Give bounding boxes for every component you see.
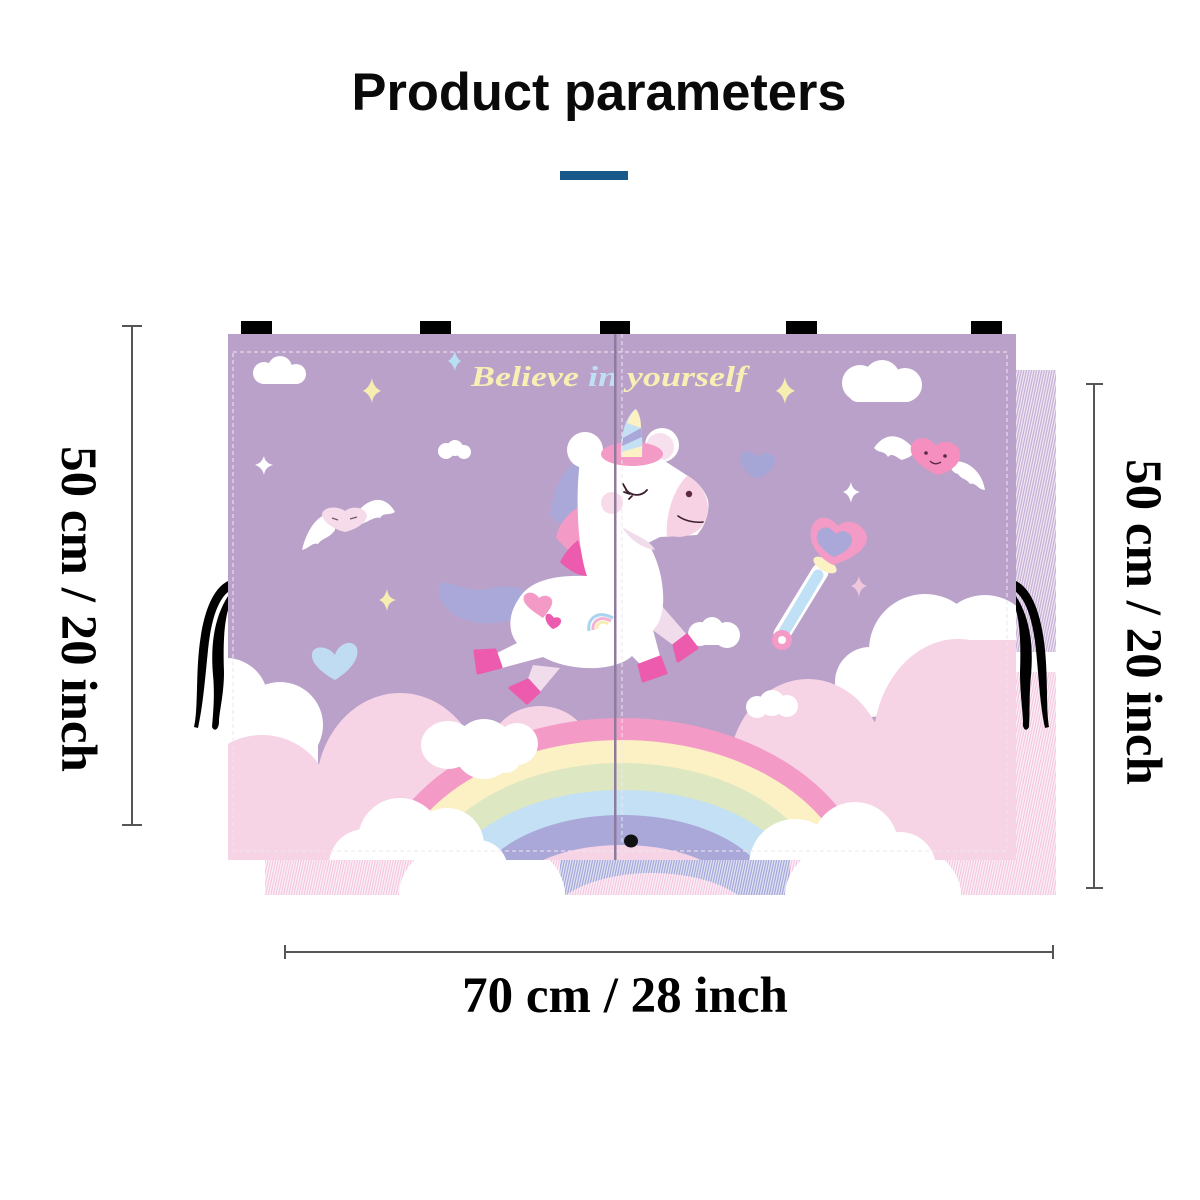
lilac heart <box>740 451 775 479</box>
unicorn pale back legs <box>526 606 688 692</box>
curtain panel <box>228 334 1016 860</box>
unicorn eye <box>623 484 647 499</box>
unicorn mane <box>550 462 590 576</box>
infographic canvas <box>62 72 1162 1012</box>
right tie cords <box>1016 581 1049 730</box>
unicorn muzzle <box>667 476 708 537</box>
blue heart <box>312 643 357 680</box>
width label: 70 cm / 28 inch <box>462 968 788 1024</box>
cloud over rainbow <box>421 719 538 779</box>
panel background <box>228 334 1016 764</box>
title accent bar <box>560 171 628 180</box>
left tie cords <box>194 581 228 730</box>
foreground white clouds <box>329 798 935 860</box>
sky cloud top right <box>842 360 922 402</box>
left height dimension line <box>122 326 142 825</box>
unicorn tail <box>439 583 525 623</box>
title: Product parameters <box>352 64 846 122</box>
center seam <box>614 334 616 860</box>
small cloud by leg <box>688 617 740 648</box>
unicorn neck shadow <box>622 527 655 550</box>
width dimension line <box>285 945 1053 959</box>
black hanging straps <box>241 321 1002 335</box>
faded reflection pattern behind curtain <box>265 370 1056 977</box>
unicorn body and head <box>497 456 709 668</box>
unicorn rainbow mark <box>589 615 613 631</box>
unicorn forelock <box>601 442 663 466</box>
unicorn mouth <box>678 516 703 522</box>
winged heart right <box>874 436 985 490</box>
unicorn horn <box>621 409 642 457</box>
pink background clouds <box>228 639 1016 860</box>
unicorn <box>439 409 709 703</box>
right height dimension line <box>1086 384 1103 888</box>
sky cloud top left <box>253 356 306 384</box>
slogan text: Believe in yourself <box>470 362 750 393</box>
right height label: 50 cm / 20 inch <box>1115 459 1171 785</box>
unicorn hooves <box>475 635 697 703</box>
left height label: 50 cm / 20 inch <box>50 446 106 772</box>
unicorn cheek <box>601 492 623 514</box>
unicorn ears <box>567 428 679 467</box>
snap button <box>624 834 638 848</box>
magic wand <box>772 518 867 650</box>
unicorn hearts <box>524 593 561 629</box>
winged heart left <box>302 500 395 550</box>
white background clouds <box>228 594 1016 763</box>
stitching <box>233 334 1007 860</box>
rainbow <box>412 718 837 860</box>
unicorn nostril <box>686 491 692 497</box>
sparkles <box>255 351 867 611</box>
sky cloud small <box>438 440 471 459</box>
small cloud right <box>746 690 798 718</box>
